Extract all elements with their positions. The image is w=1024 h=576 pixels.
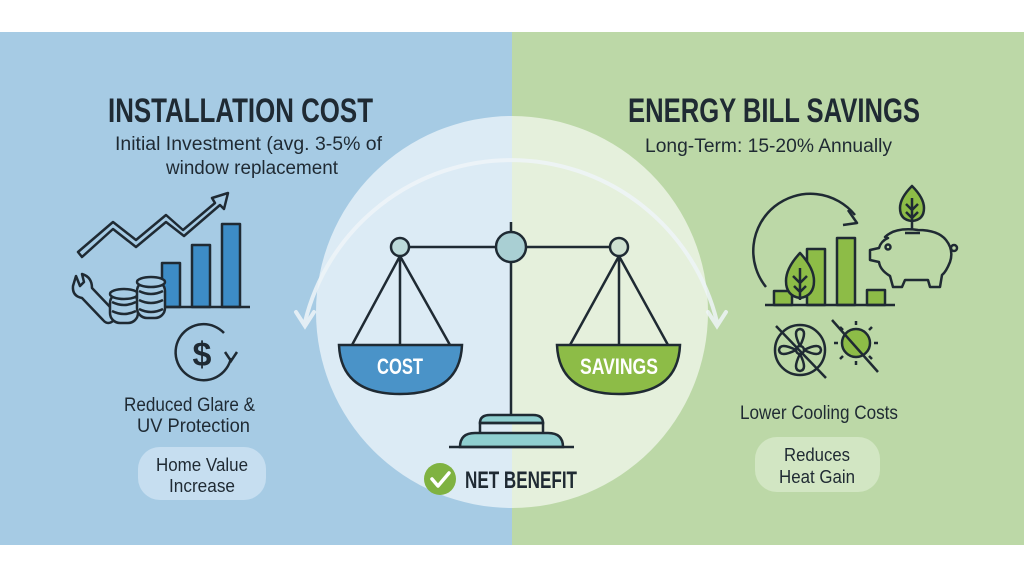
icon: cost chart with wrench and coins: [73, 193, 250, 323]
title: energy bill savings: ENERGY BILL SAVINGS: [628, 92, 920, 130]
title: installation cost: Initial Investment (avg. 3-5% of: [115, 134, 383, 155]
center circle: [316, 116, 708, 508]
title: installation cost: [108, 92, 383, 179]
icon: savings chart with leaf and piggy bank: [753, 186, 957, 305]
pan: savings: [557, 345, 680, 394]
text: reduced glare: UV Protection: [137, 416, 250, 437]
title: energy bill savings: [628, 92, 920, 157]
icon: sun crossed: [832, 320, 878, 372]
pan: cost: COST: [377, 354, 423, 379]
title: installation cost: INSTALLATION COST: [108, 92, 373, 130]
text: lower cooling costs: Lower Cooling Costs: [740, 403, 898, 424]
pill: home value increase: [138, 447, 266, 500]
icon: dollar circle: $: [193, 336, 212, 374]
text: reduced glare: Reduced Glare &: [124, 395, 255, 416]
net benefit badge: NET BENEFIT: [465, 467, 577, 494]
pill: home value increase: Home Value: [156, 455, 248, 475]
title: installation cost: window replacement: [165, 158, 339, 179]
pill: reduces heat gain: [755, 437, 880, 492]
pan: savings: SAVINGS: [580, 354, 658, 379]
text: reduced glare: [124, 395, 255, 437]
pan: cost: [339, 345, 462, 394]
icon: fan crossed: [775, 325, 826, 378]
pill: reduces heat gain: Heat Gain: [779, 467, 855, 487]
balance scale: [339, 222, 680, 447]
pill: reduces heat gain: Reduces: [784, 445, 850, 465]
pill: home value increase: Increase: [169, 476, 235, 496]
icon: dollar circle: [176, 324, 237, 380]
title: energy bill savings: Long-Term: 15-20% Annually: [645, 136, 892, 157]
net benefit badge: [424, 463, 577, 495]
arrows: arc around circle: [296, 160, 726, 326]
